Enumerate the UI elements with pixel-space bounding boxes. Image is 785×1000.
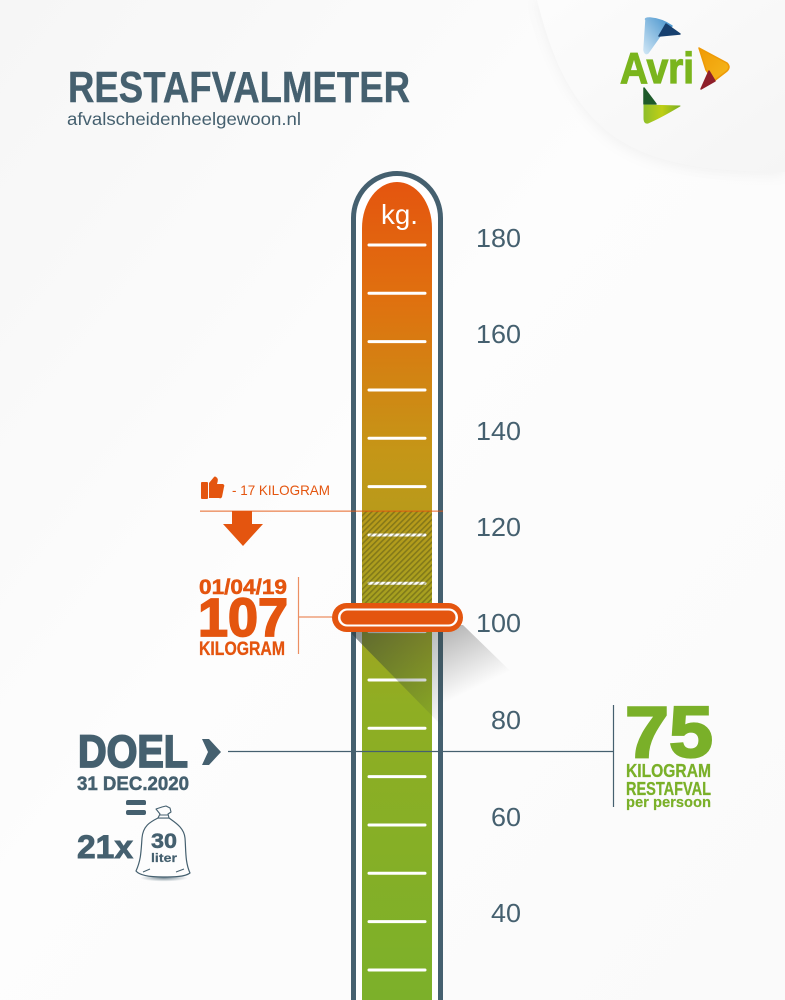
thermometer — [354, 174, 440, 1000]
arrow: down — [223, 511, 263, 546]
logo arrow: blue — [644, 18, 680, 54]
target date: 31 DEC.2020 — [77, 773, 189, 795]
unit kilogram: KILOGRAM — [199, 639, 285, 660]
scale numbers: 160 — [476, 319, 521, 349]
logo arrow: orange — [699, 48, 729, 89]
thermometer outline — [354, 174, 440, 1000]
value 75: 75 — [625, 693, 713, 773]
reduction label: - 17 KILOGRAM — [232, 482, 330, 498]
scale numbers — [476, 223, 521, 928]
title: RESTAFVALMETER — [68, 63, 410, 112]
reduction callout — [201, 476, 330, 546]
scale numbers: 140 — [476, 416, 521, 446]
target line — [228, 705, 614, 807]
scale numbers: 100 — [476, 608, 521, 638]
kilogram label: KILOGRAM — [626, 761, 711, 781]
thermometer fill — [362, 182, 432, 1000]
date: 01/04/19 — [199, 576, 287, 599]
logo wordmark: Avri — [620, 44, 694, 93]
icon: waste bag — [136, 806, 190, 882]
unit label: kg. — [381, 199, 418, 230]
reduction line — [200, 510, 443, 512]
marker long shadow — [352, 625, 504, 722]
bag count: 21x — [77, 829, 133, 865]
restafval label: RESTAFVAL — [626, 779, 711, 799]
icon: thumbs up — [201, 476, 224, 499]
scale numbers: 80 — [491, 705, 521, 735]
website url: afvalscheidenheelgewoon.nl — [67, 109, 301, 129]
scale numbers: 40 — [491, 898, 521, 928]
doel heading: DOEL — [78, 726, 188, 777]
hatched reduction zone — [362, 511, 432, 605]
scale numbers: 180 — [476, 223, 521, 253]
per persoon label: per persoon — [626, 794, 711, 811]
scale ticks — [369, 245, 425, 970]
icon: chevron — [202, 739, 221, 765]
logo: Avri — [620, 18, 729, 123]
marker: current level 107 — [332, 603, 463, 632]
bag volume: 30 — [151, 830, 177, 853]
target callout — [77, 726, 221, 882]
equals sign — [126, 800, 146, 815]
corner panel — [537, 0, 785, 174]
scale numbers: 60 — [491, 802, 521, 832]
goal value — [625, 693, 713, 811]
bag unit: liter — [151, 851, 177, 865]
logo arrow: green — [644, 88, 680, 123]
scale numbers: 120 — [476, 512, 521, 542]
current value callout — [198, 576, 332, 660]
value 107: 107 — [198, 588, 288, 648]
bracket connector — [298, 577, 332, 654]
